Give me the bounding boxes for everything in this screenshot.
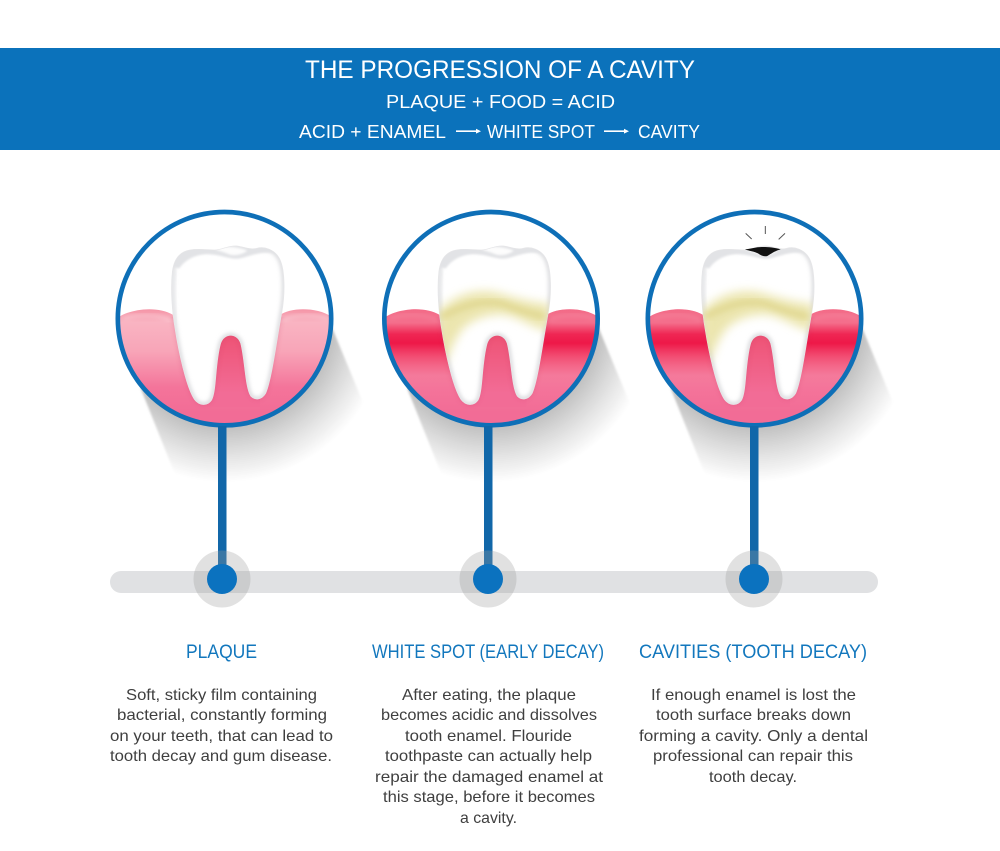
text block: white spot description bbox=[375, 687, 604, 827]
heading: cavities: CAVITIES (TOOTH DECAY) bbox=[639, 642, 867, 663]
panel: plaque tooth illustration bbox=[118, 212, 367, 487]
text block: cavities description bbox=[639, 687, 868, 786]
equation: acid plus enamel: ACID + ENAMEL bbox=[299, 121, 446, 142]
panel: white spot tooth illustration bbox=[384, 212, 633, 487]
text block: white spot description: After eating, the plaque bbox=[402, 687, 576, 704]
equation: acid plus enamel: CAVITY bbox=[638, 121, 700, 142]
title banner bbox=[0, 48, 1000, 150]
text block: cavities description: If enough enamel is lost the bbox=[651, 687, 856, 704]
text block: plaque description: on your teeth, that can lead to bbox=[110, 728, 333, 745]
heading: white spot: WHITE SPOT (EARLY DECAY) bbox=[372, 642, 604, 663]
text block: white spot description: toothpaste can actually help bbox=[385, 748, 592, 765]
equation: acid plus enamel: WHITE SPOT bbox=[487, 121, 595, 142]
connector and marker: cavities bbox=[726, 426, 782, 608]
icon: tooth with white spot stain bbox=[437, 243, 551, 405]
equation: plaque plus food: PLAQUE + FOOD = ACID bbox=[386, 91, 615, 112]
text block: cavities description: tooth surface breaks down bbox=[656, 707, 851, 724]
icon: healthy tooth bbox=[171, 243, 284, 405]
heading: plaque: PLAQUE bbox=[186, 642, 257, 663]
text block: plaque description: bacterial, constantly forming bbox=[117, 707, 327, 724]
text block: cavities description: professional can repair this bbox=[653, 748, 853, 765]
equation: acid plus enamel bbox=[299, 121, 700, 142]
timeline bar bbox=[110, 571, 878, 593]
text block: plaque description bbox=[110, 687, 333, 765]
text block: white spot description: a cavity. bbox=[460, 810, 517, 827]
text block: white spot description: becomes acidic and dissolves bbox=[381, 707, 597, 724]
connector and marker: white spot bbox=[460, 426, 516, 608]
text block: cavities description: forming a cavity. Only a dental bbox=[639, 728, 868, 745]
title: THE PROGRESSION OF A CAVITY bbox=[305, 56, 695, 84]
text block: plaque description: Soft, sticky film containing bbox=[126, 687, 317, 704]
text block: white spot description: tooth enamel. Flouride bbox=[405, 728, 572, 745]
text block: white spot description: this stage, before it becomes bbox=[383, 789, 595, 806]
icon: tooth with cavity bbox=[701, 226, 814, 405]
panel: cavity tooth illustration bbox=[648, 212, 897, 487]
text block: plaque description: tooth decay and gum disease. bbox=[110, 748, 332, 765]
connector and marker: plaque bbox=[194, 426, 250, 608]
text block: white spot description: repair the damaged enamel at bbox=[375, 769, 604, 786]
text block: cavities description: tooth decay. bbox=[709, 769, 797, 786]
